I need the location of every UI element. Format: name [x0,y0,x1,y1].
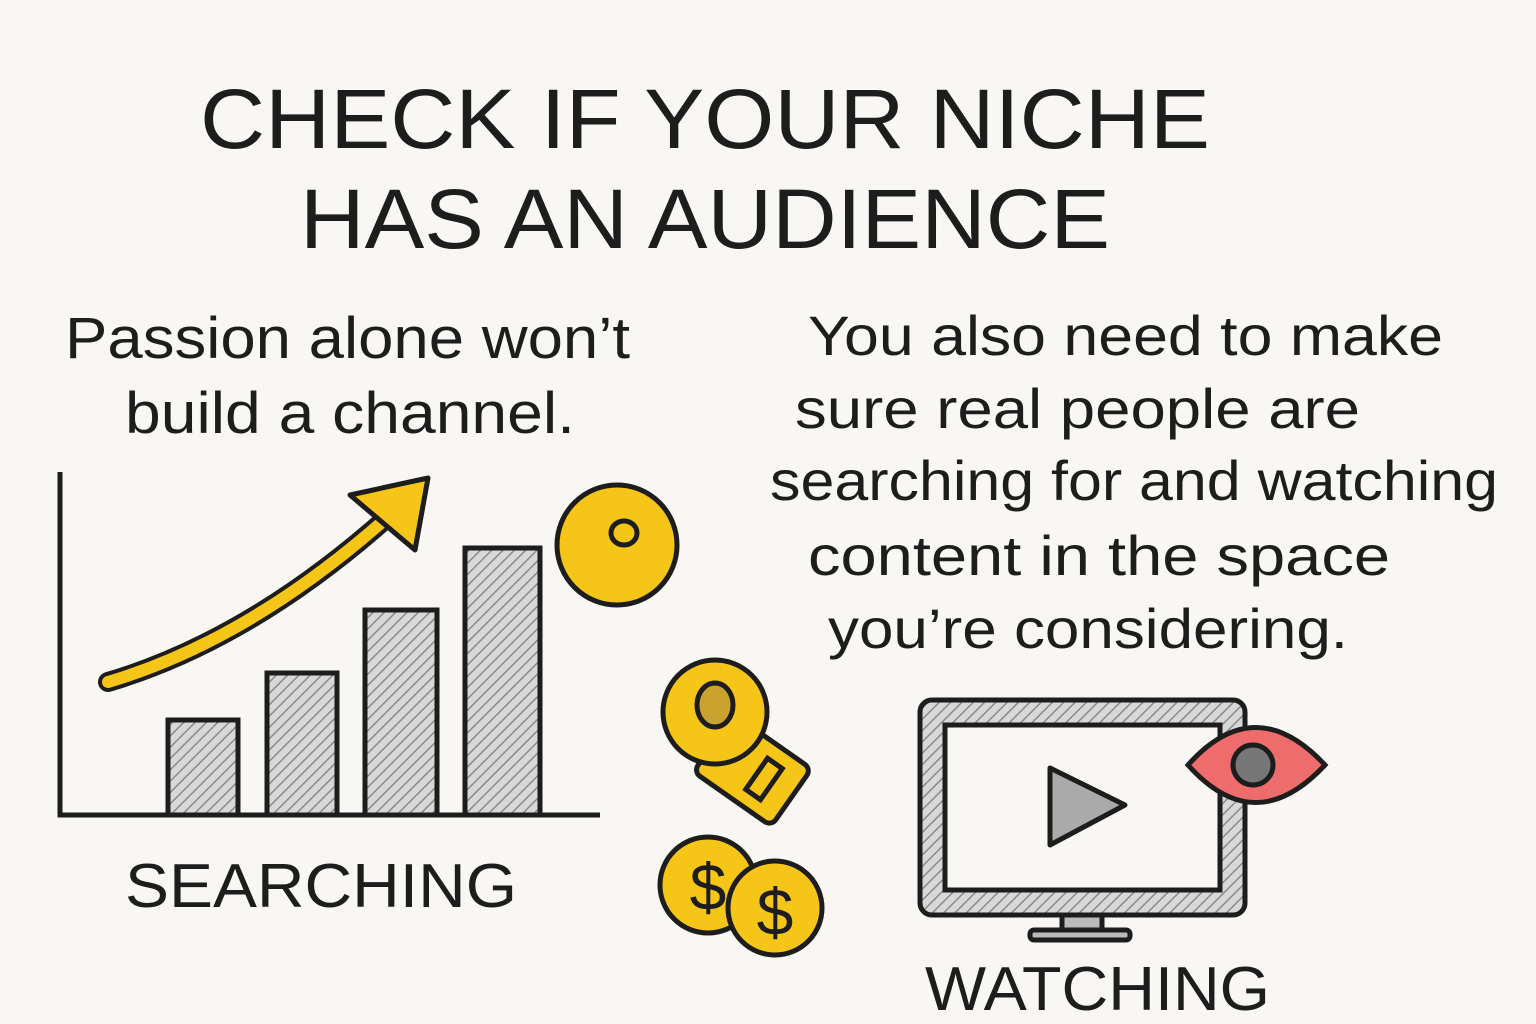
icon: eye [1188,728,1325,802]
text: you also need: content in the space [808,524,1390,587]
icon: coins cluster [660,660,822,955]
text: you also need: You also need to make [808,304,1443,367]
arrow: growth [108,478,428,682]
icon: coins cluster: $ [757,875,793,949]
label: searching: SEARCHING [125,852,517,921]
text: you also need [770,304,1498,660]
title: CHECK IF YOUR NICHE [200,72,1210,166]
label: watching: WATCHING [925,955,1270,1024]
icon: coin [557,485,677,605]
text: passion alone: Passion alone won’t [65,306,630,371]
text: you also need: you’re considering. [828,597,1348,660]
text: you also need: sure real people are [795,377,1360,440]
icon: coins cluster: $ [690,850,726,924]
title: HAS AN AUDIENCE [300,172,1110,266]
icon: monitor [920,700,1245,940]
text: passion alone: build a channel. [125,381,575,446]
text: you also need: searching for and watching [770,449,1498,512]
title [200,72,1210,266]
text: passion alone [65,306,630,446]
bar chart: searching [60,472,600,815]
